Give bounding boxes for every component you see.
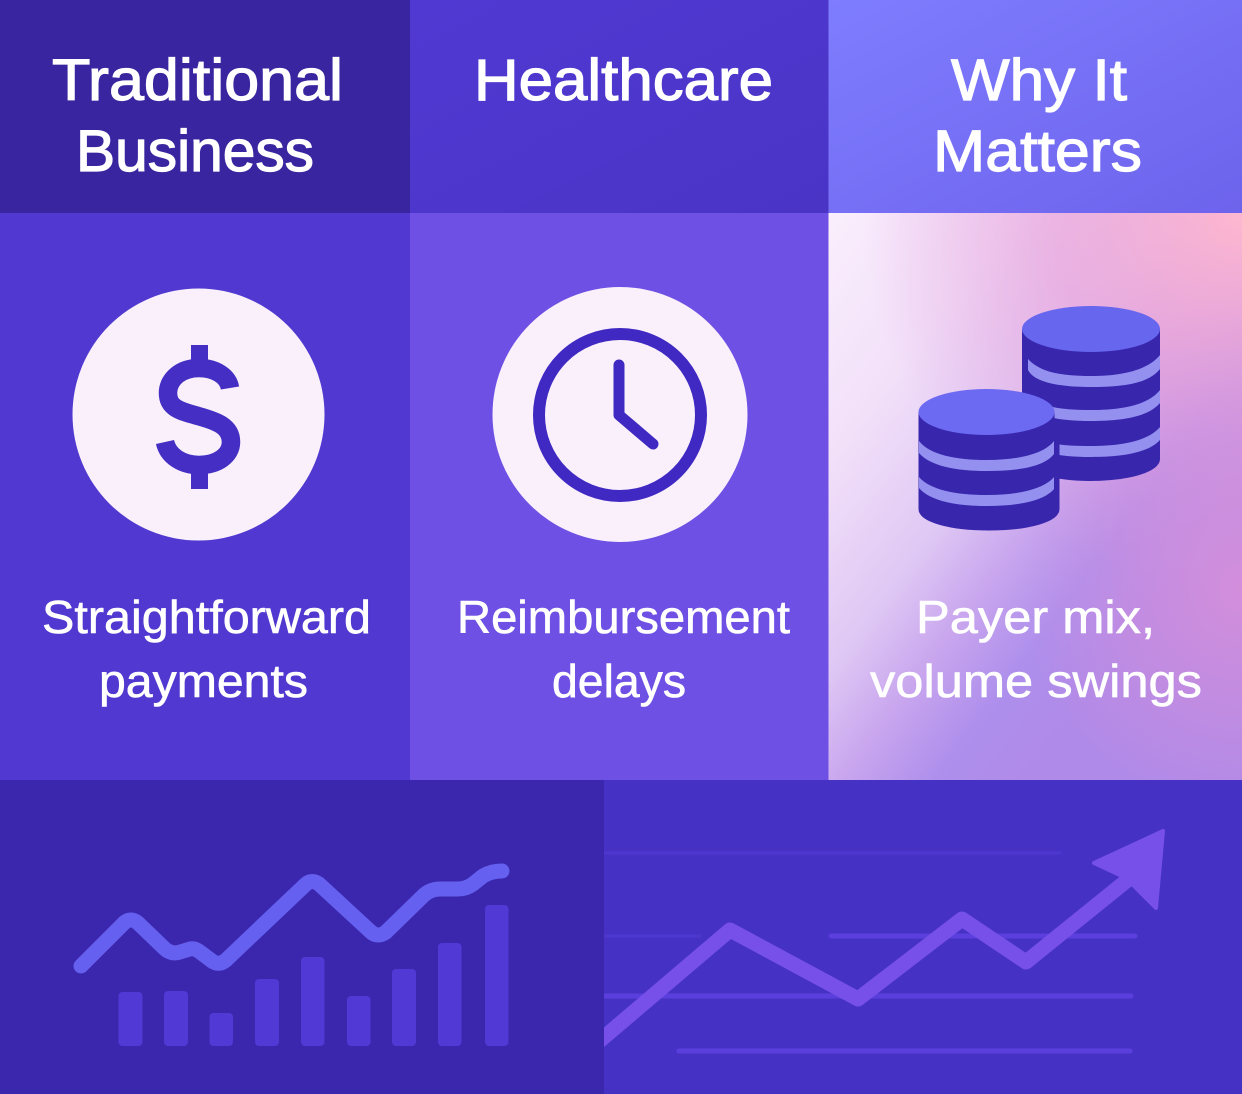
- heading: Why It Matters: [933, 48, 1142, 184]
- panel: Why It Matters header: [828, 0, 1242, 213]
- heading: Why It Matters: Why It: [951, 48, 1127, 113]
- heading: Healthcare: Healthcare: [474, 48, 773, 113]
- trend arrow: [596, 831, 1163, 1044]
- chart grid lines: [600, 853, 1135, 1051]
- line chart: [81, 871, 502, 966]
- heading: Traditional Business: Traditional: [52, 48, 343, 113]
- bar chart: [118, 905, 508, 1046]
- panel: Healthcare body: [410, 213, 829, 780]
- front coin stack: [918, 389, 1059, 530]
- heading: Why It Matters: Matters: [933, 119, 1142, 184]
- text: Payer mix, volume swings: [870, 591, 1202, 707]
- text: Reimbursement delays: [457, 591, 790, 707]
- panel: Traditional Business body: [0, 213, 411, 780]
- text: Straightforward payments: Straightforward: [42, 591, 371, 643]
- panel: bottom right chart: [596, 780, 1242, 1094]
- icon: stacks of coins: [918, 306, 1160, 530]
- text: Reimbursement delays: Reimbursement: [457, 591, 790, 643]
- icon: clock in circle: [492, 287, 748, 542]
- panel: bottom left chart: [0, 780, 604, 1094]
- text: Reimbursement delays: delays: [552, 655, 686, 707]
- panel: Healthcare header: [410, 0, 829, 213]
- heading: Traditional Business: Business: [76, 119, 314, 184]
- text: Payer mix, volume swings: volume swings: [870, 655, 1202, 707]
- text: Straightforward payments: [42, 591, 371, 707]
- text: Straightforward payments: payments: [99, 655, 308, 707]
- text: Payer mix, volume swings: Payer mix,: [916, 591, 1155, 643]
- back coin stack: [1022, 306, 1160, 481]
- icon: dollar sign in circle: [72, 288, 324, 540]
- heading: Traditional Business: [52, 48, 343, 184]
- panel: Traditional Business header: [0, 0, 411, 213]
- panel: Why It Matters body: [828, 213, 1242, 780]
